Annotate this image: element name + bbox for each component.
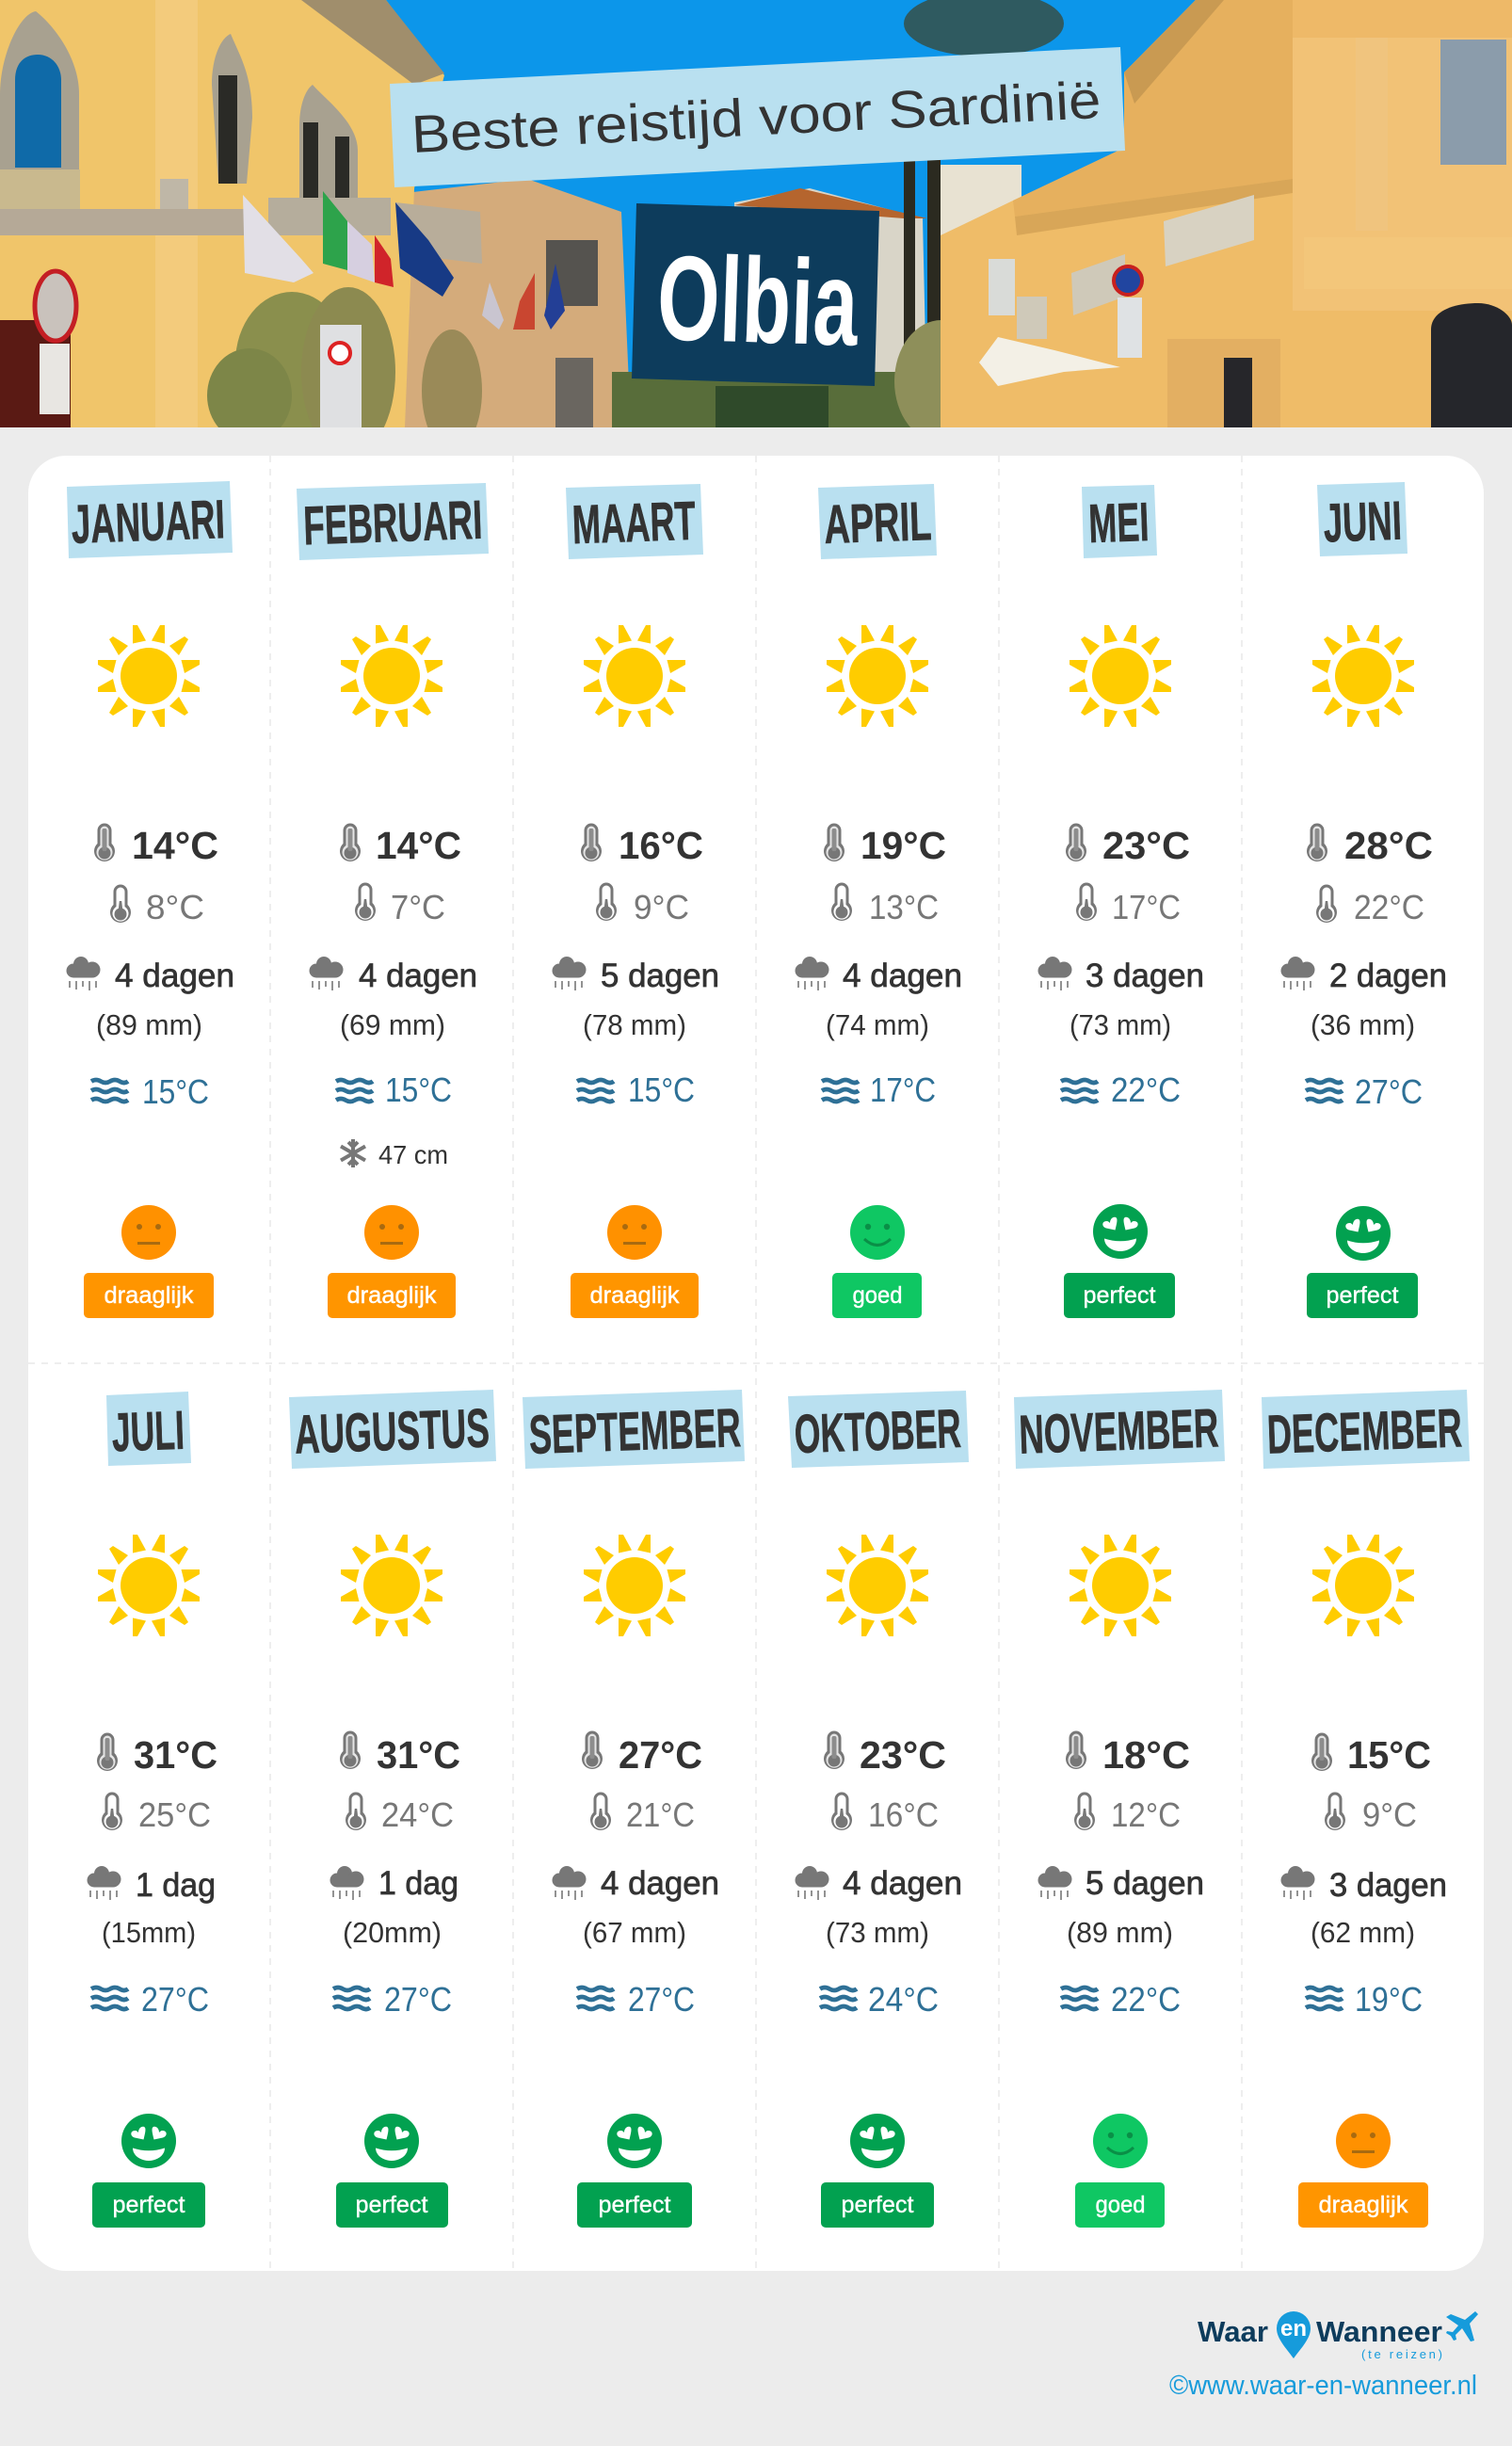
month heading: JUNI — [1323, 491, 1403, 554]
low temperature: 7°C — [391, 888, 445, 926]
rating badge — [1298, 2182, 1428, 2228]
month heading: MEI — [1087, 491, 1150, 555]
icon: rating face — [607, 1205, 662, 1260]
month heading — [106, 1392, 191, 1466]
rain days: 5 dagen — [601, 957, 719, 994]
low temperature — [831, 1793, 939, 1834]
sea temperature — [1306, 1980, 1423, 2019]
rating badge — [92, 2182, 205, 2228]
low temperature: 16°C — [868, 1795, 939, 1834]
right building — [941, 0, 1512, 427]
sea temperature — [577, 1980, 695, 2019]
rain days — [309, 957, 477, 994]
column: februari — [297, 483, 489, 1318]
rating badge: draaglijk — [589, 1282, 680, 1309]
column: juni — [1280, 482, 1447, 1318]
icon: sun — [584, 1535, 685, 1636]
precipitation: (89 mm) — [1067, 1916, 1173, 1949]
month heading: NOVEMBER — [1018, 1397, 1219, 1466]
low temperature: 9°C — [634, 888, 689, 926]
left doorway and signs — [0, 271, 362, 427]
rating badge — [84, 1273, 214, 1318]
high temperature: 19°C — [861, 824, 946, 867]
city label: Olbia: Olbia — [655, 231, 861, 372]
high temperature — [97, 1732, 217, 1777]
icon: rating face — [121, 1205, 176, 1260]
low temperature: 24°C — [381, 1795, 454, 1834]
high temperature — [1066, 1730, 1190, 1777]
high temperature — [824, 1730, 946, 1777]
icon: rating face — [850, 2114, 905, 2168]
month heading — [523, 1390, 745, 1469]
low temperature — [1074, 1793, 1181, 1834]
icon: rating face — [121, 2114, 176, 2168]
precipitation: (69 mm) — [340, 1008, 445, 1041]
rating badge — [336, 2182, 448, 2228]
high temperature: 28°C — [1344, 824, 1433, 867]
month heading: SEPTEMBER — [528, 1397, 742, 1466]
high temperature — [1307, 823, 1433, 867]
column: januari — [66, 481, 234, 1318]
low temperature — [346, 1793, 454, 1834]
sea temperature — [91, 1072, 209, 1111]
flags — [243, 191, 565, 330]
rating badge — [577, 2182, 692, 2228]
precipitation: (20mm) — [343, 1916, 442, 1949]
rain days: 4 dagen — [115, 957, 234, 994]
high temperature: 31°C — [377, 1733, 460, 1777]
low temperature — [1316, 885, 1424, 926]
icon: rating face — [607, 2114, 662, 2168]
icon: sun — [827, 1535, 928, 1636]
low temperature: 17°C — [1112, 888, 1181, 926]
rating badge — [1307, 1273, 1418, 1318]
low temperature: 22°C — [1354, 888, 1424, 926]
precipitation: (36 mm) — [1311, 1008, 1415, 1041]
rating badge — [571, 1273, 699, 1318]
footer logo: Waar — [1198, 2315, 1268, 2348]
low temperature — [355, 883, 445, 926]
awning and parking sign — [979, 266, 1142, 386]
rating badge: perfect — [1326, 1282, 1399, 1309]
rating badge — [328, 1273, 456, 1318]
rain days: 3 dagen — [1329, 1867, 1447, 1904]
sea temperature: 27°C — [1355, 1072, 1423, 1111]
low temperature: 8°C — [146, 888, 204, 926]
website url: ©www.waar-en-wanneer.nl — [1169, 2371, 1477, 2401]
icon: sun — [98, 625, 200, 727]
low temperature — [110, 885, 204, 926]
sea temperature — [1061, 1070, 1181, 1109]
low temperature: 9°C — [1362, 1795, 1417, 1834]
icon: sun — [341, 1535, 442, 1636]
low temperature — [831, 883, 939, 926]
month heading — [788, 1391, 969, 1468]
sea temperature — [820, 1980, 939, 2019]
rating badge: perfect — [842, 2192, 914, 2218]
column: augustus — [289, 1390, 496, 2228]
low temperature — [590, 1793, 695, 1834]
title banner — [390, 47, 1125, 187]
rain days: 4 dagen — [843, 1865, 962, 1902]
sea temperature — [822, 1070, 936, 1109]
precipitation: (73 mm) — [1070, 1008, 1171, 1041]
precipitation: (74 mm) — [826, 1008, 929, 1041]
sea temperature: 15°C — [385, 1070, 452, 1109]
rain days: 1 dag — [378, 1865, 458, 1902]
icon: sun — [584, 625, 685, 727]
precipitation: (78 mm) — [583, 1008, 686, 1041]
rain days: 1 dag — [136, 1867, 216, 1904]
rating badge — [1075, 2182, 1165, 2228]
palm trunks — [904, 160, 941, 345]
snowfall — [341, 1139, 448, 1169]
high temperature: 14°C — [132, 824, 218, 867]
rain days: 3 dagen — [1086, 957, 1204, 994]
icon: rating face — [1336, 1206, 1391, 1261]
sea temperature — [333, 1980, 452, 2019]
footer logo: Wanneer — [1316, 2315, 1442, 2348]
sea temperature: 24°C — [868, 1980, 939, 2019]
snowfall: 47 cm — [378, 1140, 448, 1169]
high temperature: 18°C — [1102, 1733, 1190, 1777]
footer logo: (te reizen) — [1361, 2347, 1442, 2361]
low temperature — [1325, 1793, 1417, 1834]
high temperature: 27°C — [619, 1733, 702, 1777]
tree top — [904, 0, 1064, 56]
icon: sun — [1312, 1535, 1414, 1636]
rating badge: draaglijk — [346, 1282, 437, 1309]
sea temperature — [1306, 1072, 1423, 1111]
rating badge: goed — [853, 1282, 902, 1309]
column: mei — [1037, 485, 1204, 1318]
high temperature: 15°C — [1347, 1733, 1431, 1777]
month heading: OKTOBER — [794, 1398, 962, 1465]
street trees — [207, 287, 941, 427]
rating badge: perfect — [1083, 1282, 1156, 1309]
sea temperature: 27°C — [628, 1980, 695, 2019]
precipitation: (73 mm) — [826, 1916, 929, 1949]
month heading — [1082, 485, 1157, 558]
high temperature: 14°C — [376, 824, 461, 867]
sea temperature: 27°C — [384, 1980, 452, 2019]
month heading: AUGUSTUS — [294, 1397, 491, 1466]
low temperature: 21°C — [626, 1795, 695, 1834]
sea temperature: 17°C — [870, 1070, 936, 1109]
icon: rating face — [1093, 1204, 1148, 1259]
low temperature — [1076, 883, 1181, 926]
high temperature — [1311, 1732, 1431, 1777]
rating badge — [832, 1273, 922, 1318]
low temperature: 25°C — [138, 1795, 211, 1834]
month heading — [1014, 1390, 1225, 1469]
rain days — [795, 957, 962, 994]
left windows — [0, 11, 358, 198]
rain days — [87, 1866, 216, 1904]
month heading — [566, 484, 703, 559]
month heading — [818, 484, 937, 559]
month heading — [1317, 482, 1407, 556]
month heading — [289, 1390, 496, 1469]
icon: rating face — [850, 1205, 905, 1260]
high temperature — [582, 1730, 702, 1777]
rain days — [330, 1865, 458, 1902]
column: april — [795, 484, 962, 1318]
sea temperature: 19°C — [1355, 1980, 1423, 2019]
column: maart — [552, 484, 719, 1318]
city label: Olbia — [632, 203, 879, 386]
month heading — [297, 483, 489, 560]
high temperature: 23°C — [1102, 824, 1190, 867]
icon: sun — [1070, 1535, 1171, 1636]
high temperature: 23°C — [860, 1733, 946, 1777]
sea temperature: 22°C — [1111, 1980, 1181, 2019]
rain days — [66, 957, 234, 994]
low temperature: 12°C — [1111, 1795, 1181, 1834]
icon: rating face — [364, 1205, 419, 1260]
low temperature — [102, 1793, 211, 1834]
precipitation: (15mm) — [102, 1916, 196, 1949]
precipitation: (89 mm) — [96, 1008, 202, 1041]
precipitation: (62 mm) — [1311, 1916, 1415, 1949]
rain days — [1280, 957, 1447, 994]
high temperature — [1066, 823, 1190, 867]
rating badge: draaglijk — [1318, 2192, 1408, 2218]
left building — [0, 0, 482, 427]
icon: sun — [1312, 625, 1414, 727]
sea temperature: 27°C — [141, 1980, 209, 2019]
high temperature — [824, 823, 946, 867]
month heading — [67, 481, 233, 558]
rating badge: perfect — [356, 2192, 428, 2218]
month heading: APRIL — [823, 491, 932, 555]
high temperature — [94, 823, 218, 867]
rain days: 4 dagen — [843, 957, 962, 994]
icon: sun — [827, 625, 928, 727]
rating badge: perfect — [599, 2192, 671, 2218]
column: december — [1262, 1390, 1470, 2228]
icon: rating face — [1336, 2114, 1391, 2168]
high temperature — [581, 823, 703, 867]
icon: sun — [1070, 625, 1171, 727]
rain days: 4 dagen — [359, 957, 477, 994]
footer logo — [1198, 2311, 1478, 2361]
sea temperature — [91, 1980, 209, 2019]
month heading: MAART — [571, 491, 697, 555]
icon: rating face — [1093, 2114, 1148, 2168]
sea temperature — [336, 1070, 452, 1109]
icon: sun — [341, 625, 442, 727]
icon: rating face — [364, 2114, 419, 2168]
sea temperature — [1061, 1980, 1181, 2019]
title banner: Beste reistijd voor Sardinië — [410, 70, 1102, 164]
sea temperature: 22°C — [1111, 1070, 1181, 1109]
precipitation: (67 mm) — [583, 1916, 686, 1949]
low temperature: 13°C — [869, 888, 939, 926]
panel: climate table — [28, 456, 1484, 2271]
column: juli — [87, 1392, 217, 2228]
rain days: 2 dagen — [1329, 957, 1447, 994]
rain days — [1037, 957, 1204, 994]
column: november — [1014, 1390, 1225, 2228]
rain days — [1280, 1866, 1447, 1904]
high temperature — [340, 1730, 460, 1777]
rating badge — [821, 2182, 934, 2228]
month heading: JULI — [111, 1400, 185, 1463]
sea temperature — [577, 1070, 695, 1109]
column: oktober — [788, 1391, 969, 2228]
rating badge: draaglijk — [104, 1282, 194, 1309]
rain days: 5 dagen — [1086, 1865, 1204, 1902]
centre buildings — [405, 165, 1021, 427]
rating badge — [1064, 1273, 1175, 1318]
sea temperature: 15°C — [142, 1072, 209, 1111]
rating badge: perfect — [113, 2192, 185, 2218]
rain days — [552, 957, 719, 994]
month heading: JANUARI — [71, 489, 226, 555]
column: september — [523, 1390, 745, 2228]
high temperature — [340, 823, 461, 867]
icon: sun — [98, 1535, 200, 1636]
rain days: 4 dagen — [601, 1865, 719, 1902]
month heading: FEBRUARI — [302, 490, 483, 556]
footer logo: en — [1280, 2316, 1307, 2341]
high temperature: 16°C — [619, 824, 703, 867]
sea temperature: 15°C — [628, 1070, 695, 1109]
header photo: Olbia street — [0, 0, 1512, 457]
low temperature — [596, 883, 689, 926]
high temperature: 31°C — [134, 1733, 217, 1777]
rating badge: goed — [1096, 2192, 1145, 2218]
